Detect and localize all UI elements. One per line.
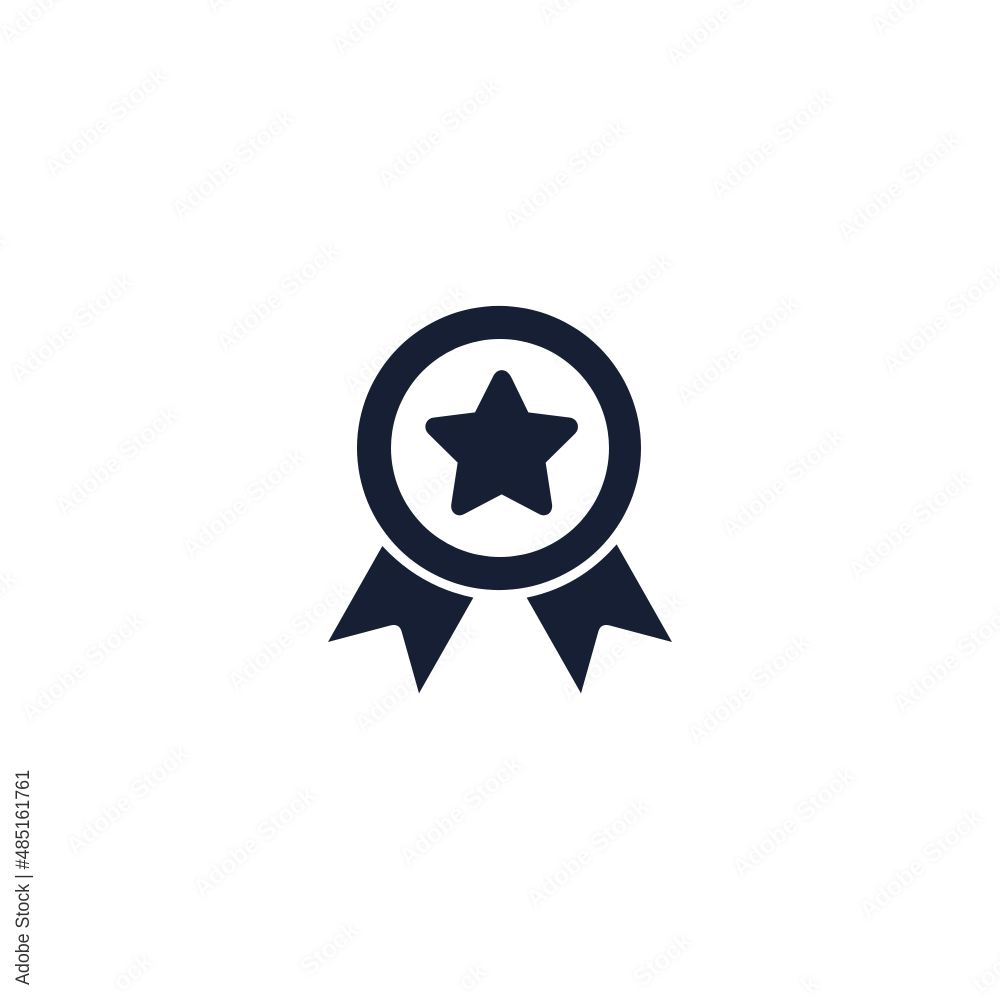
watermark pattern: Adobe Stock [61, 739, 194, 861]
watermark pattern: Adobe Stock [394, 750, 527, 872]
watermark pattern: Adobe Stock [372, 72, 505, 194]
watermark pattern: Adobe Stock [555, 586, 688, 708]
watermark pattern: Adobe Stock [383, 411, 516, 533]
watermark pattern: Adobe Stock [39, 61, 172, 183]
side credit text: Adobe Stock | #485161761 [13, 770, 34, 985]
watermark pattern: k [796, 969, 825, 1000]
watermark pattern: Adobe Stock [338, 278, 471, 400]
watermark pattern: Adobe Stock [521, 792, 654, 914]
watermark pattern: Adobe Stock [211, 236, 344, 358]
watermark pattern: Adobe Stock [349, 617, 482, 739]
icon: star [425, 370, 578, 515]
watermark pattern: ock [108, 947, 159, 997]
watermark pattern: Adobe Stock [5, 267, 138, 389]
watermark pattern: Adobe Stock [832, 125, 965, 247]
icon: right ribbon [527, 544, 672, 693]
watermark pattern: Adobe Stock [854, 803, 987, 925]
watermark pattern: Adobe Stock [188, 781, 321, 903]
icon: left ribbon [328, 546, 473, 693]
watermark pattern: Adobe Stock [499, 114, 632, 236]
watermark pattern: Adobe Stock [222, 575, 355, 697]
watermark pattern: Adobe Stock [510, 453, 643, 575]
watermark pattern: Adobe Stock [682, 628, 815, 750]
watermark pattern: ck [453, 957, 492, 997]
icon: award badge [328, 306, 672, 693]
watermark pattern: Adobe Stock [166, 103, 299, 225]
watermark pattern: Stock [628, 927, 697, 993]
badge ring [357, 306, 641, 590]
watermark pattern: Adobe Stock [671, 289, 804, 411]
watermark pattern: Adobe Stock [177, 442, 310, 564]
watermark pattern: Adobe Stock [16, 606, 149, 728]
watermark pattern: Adobe Stock [544, 247, 677, 369]
watermark pattern: Adobe Stock [50, 400, 183, 522]
watermark pattern: Adobe Stock [727, 761, 860, 883]
watermark pattern: Adobe Stock [843, 464, 976, 586]
watermark pattern: Stock [295, 916, 364, 982]
watermark pattern: Adobe Stock [716, 422, 849, 544]
watermark pattern: Adobe Stock [705, 83, 838, 205]
